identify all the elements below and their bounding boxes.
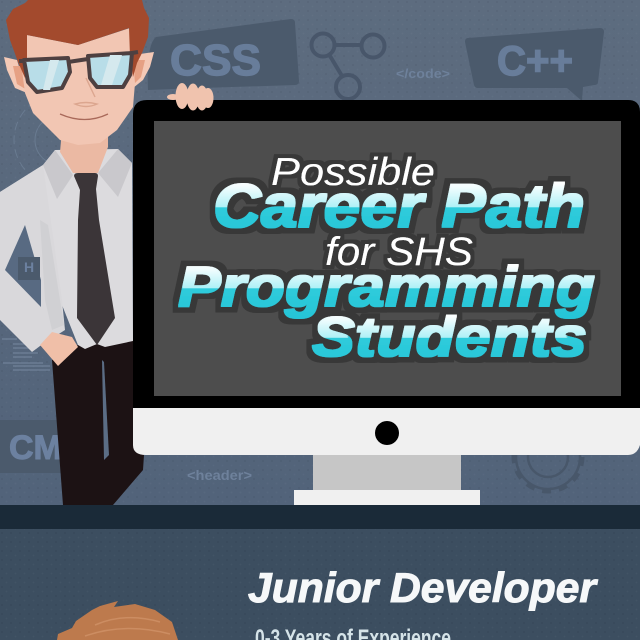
shirt sleeve [0, 165, 65, 352]
title line: Students: Students [312, 305, 587, 368]
title [178, 151, 595, 368]
icon: git branch nodes [312, 34, 384, 99]
lower panel: junior developer [0, 529, 640, 640]
trouser gap [102, 360, 109, 460]
monitor stand neck [313, 454, 461, 490]
ear shading [13, 60, 145, 90]
speech bubble: CSS: CSS [170, 36, 261, 85]
speech bubble: C++ [465, 28, 604, 101]
dark divider band [0, 505, 640, 529]
hand on monitor [167, 83, 214, 110]
label box: CMS: CMS [9, 429, 85, 467]
hand in pocket [40, 332, 78, 366]
code tag label: close code: </code> [396, 66, 450, 81]
speech bubble: C++: C++ [497, 37, 573, 84]
glasses [19, 52, 138, 92]
neck [60, 130, 108, 173]
sleeve crease [40, 220, 64, 330]
trousers [52, 340, 144, 505]
title line: Programming: Programming [178, 255, 595, 319]
monitor [133, 100, 640, 505]
hair of junior developer [57, 601, 178, 640]
hair [6, 0, 149, 78]
label inside arm gap: H [24, 259, 34, 275]
decorative text lines [2, 339, 50, 370]
face [22, 28, 135, 145]
collar left [43, 150, 73, 199]
title line: Possible: Possible [271, 151, 435, 194]
arm gap [5, 225, 41, 307]
necktie [74, 173, 115, 345]
code tag label: header: <header> [187, 468, 252, 483]
illustration: developer man [0, 0, 154, 505]
speech bubble: CSS [148, 19, 299, 90]
label box: CMS [0, 420, 85, 473]
shirt body [0, 149, 133, 349]
background: hero panel [0, 0, 640, 505]
title line: Career Path: Career Path [213, 172, 585, 240]
background icon: gear under monitor [514, 422, 582, 492]
camera dot [375, 421, 399, 445]
monitor bezel [133, 100, 640, 408]
heading: Junior Developer: Junior Developer [248, 564, 599, 611]
monitor screen [154, 121, 621, 396]
ear left [4, 57, 27, 93]
background icon: gear behind head [14, 94, 106, 186]
monitor stand base [294, 490, 480, 505]
title line: for SHS: for SHS [325, 230, 473, 274]
label inside arm gap [18, 257, 40, 280]
ear right [133, 52, 154, 88]
collar right [98, 149, 132, 197]
monitor chin [133, 400, 640, 455]
nose and mouth [75, 78, 97, 106]
